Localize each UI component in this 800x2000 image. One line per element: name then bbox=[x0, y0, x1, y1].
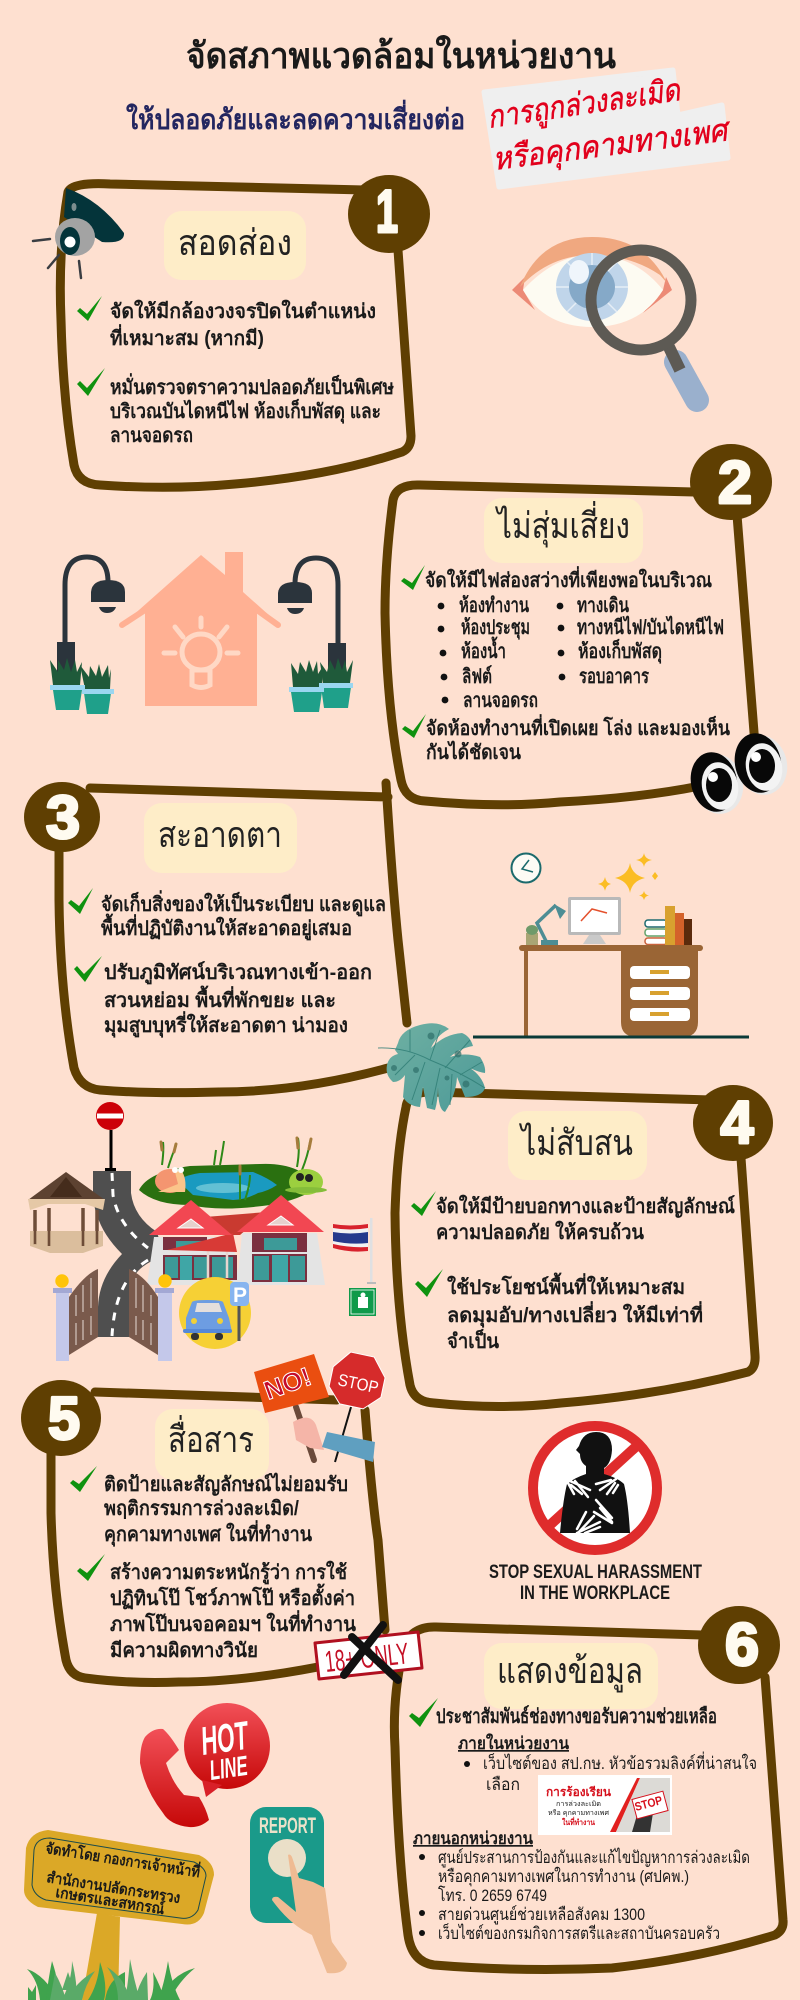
panel: card 1 bbox=[33, 175, 430, 487]
bullet list: lit areas: ห้องทำงาน bbox=[459, 594, 529, 617]
bullet list: lit areas bbox=[438, 594, 724, 712]
icon: eye and magnifying glass bbox=[512, 237, 697, 400]
text block: external channels bbox=[413, 1829, 750, 1943]
check mark bbox=[401, 565, 425, 590]
heading: card 3 bbox=[144, 803, 297, 873]
Thai flag bbox=[333, 1218, 376, 1284]
organiser text bbox=[44, 1837, 202, 1918]
icon: monstera leaf bbox=[378, 1023, 485, 1112]
grass bbox=[27, 1959, 195, 2000]
organiser text: เกษตรและสหกรณ์ bbox=[54, 1883, 166, 1918]
number badge 5: 5 bbox=[48, 1385, 80, 1452]
heading: card 3: สะอาดตา bbox=[158, 814, 282, 855]
frog bbox=[285, 1169, 327, 1195]
caption: stop sexual harassment bbox=[489, 1562, 702, 1604]
text block: internal channels: เลือก bbox=[486, 1775, 520, 1794]
NO and STOP signs held by hand: NO! bbox=[260, 1361, 315, 1406]
text block: cameras bbox=[110, 299, 376, 350]
clock bbox=[512, 854, 540, 882]
subtitle: ให้ปลอดภัยและลดความเสี่ยงต่อ bbox=[126, 99, 465, 135]
desk bbox=[519, 945, 703, 1037]
text block: landscape: สวนหย่อม พื้นที่พักขยะ และ bbox=[104, 985, 336, 1012]
check mark bbox=[77, 1554, 105, 1581]
number badge 4: 4 bbox=[720, 1089, 754, 1156]
check mark bbox=[415, 1269, 443, 1297]
illustration: workplace map bbox=[28, 1102, 376, 1361]
heading: card 6 bbox=[484, 1643, 658, 1709]
text block: awareness: มีความผิดทางวินัย bbox=[110, 1639, 258, 1662]
text block: awareness: ภาพโป๊บนจอคอมฯ ในที่ทำงาน bbox=[110, 1609, 356, 1636]
number badge 2 bbox=[690, 444, 772, 520]
pond bbox=[139, 1138, 318, 1208]
monitor bbox=[568, 897, 621, 944]
icon: stop sexual harassment bbox=[533, 1426, 657, 1550]
text block: landscape: ปรับภูมิทัศน์บริเวณทางเข้า-ออก bbox=[104, 961, 372, 986]
assembly point sign bbox=[349, 1288, 376, 1316]
text block: patrol: ลานจอดรถ bbox=[110, 425, 193, 447]
card 6 outline bbox=[394, 1627, 783, 1969]
text block: internal channels bbox=[458, 1733, 757, 1794]
text block: signage: จัดให้มีป้ายบอกทางและป้ายสัญลักษณ์ bbox=[436, 1194, 735, 1218]
panel: card 3 bbox=[24, 782, 407, 1093]
check mark bbox=[411, 1191, 436, 1216]
heading: card 1: สอดส่อง bbox=[178, 222, 292, 263]
icon: hotline: HOT bbox=[198, 1714, 253, 1764]
panel: card 5 bbox=[21, 1349, 389, 1682]
heading: card 2 bbox=[484, 498, 643, 563]
panel: card 2 bbox=[385, 444, 793, 819]
text block: awareness: สร้างความตระหนักรู้ว่า การใช้ bbox=[110, 1560, 347, 1586]
desk lamp and plant bbox=[526, 904, 566, 945]
bullet list: lit areas: ห้องเก็บพัสดุ bbox=[578, 638, 662, 664]
no-entry sign bbox=[96, 1102, 124, 1171]
bullet list: lit areas: ห้องประชุม bbox=[461, 616, 530, 640]
text block: space use: ใช้ประโยชน์พื้นที่ให้เหมาะสม bbox=[447, 1272, 685, 1299]
number badge 4 bbox=[693, 1085, 773, 1161]
thumbnail: complaint banner: หรือ คุกคามทางเพศ bbox=[548, 1809, 610, 1817]
sign board bbox=[24, 1830, 214, 1925]
text block: signage: ความปลอดภัย ให้ครบถ้วน bbox=[436, 1220, 644, 1244]
text block: signage against harassment bbox=[104, 1472, 348, 1547]
text block: external channels: เว็บไซต์ของกรมกิจการสตรีและสถาบันครอบครัว bbox=[438, 1922, 720, 1943]
highlighted subtitle: harassment bbox=[484, 70, 734, 187]
thumbnail: complaint banner: การร้องเรียน bbox=[546, 1785, 612, 1799]
check mark bbox=[70, 1466, 97, 1492]
bullet list: lit areas: ห้องน้ำ bbox=[461, 636, 506, 663]
snail bbox=[155, 1167, 186, 1193]
sticker: 18+ only crossed out bbox=[315, 1625, 422, 1680]
number badge 2: 2 bbox=[718, 449, 752, 516]
gazebo bbox=[28, 1172, 105, 1253]
house bbox=[122, 552, 280, 706]
text block: open rooms: กันได้ชัดเจน bbox=[426, 740, 521, 764]
text block: signage against harassment: ติดป้ายและสัญลักษณ์ไม่ยอมรับ bbox=[104, 1472, 348, 1496]
text block: tidy: พื้นที่ปฏิบัติงานให้สะอาดอยู่เสมอ bbox=[101, 913, 352, 942]
text block: awareness: ปฏิทินโป๊ โชว์ภาพโป๊ หรือตั้งค่า bbox=[110, 1583, 355, 1610]
text block: tidy bbox=[101, 889, 386, 942]
check mark bbox=[74, 956, 102, 982]
text block: tidy: จัดเก็บสิ่งของให้เป็นระเบียบ และดูแล bbox=[101, 889, 386, 918]
text block: awareness bbox=[110, 1560, 356, 1662]
heading: card 4: ไม่สับสน bbox=[518, 1122, 633, 1163]
text block: lighting: จัดให้มีไฟส่องสว่างที่เพียงพอในบริเวณ bbox=[425, 565, 712, 592]
number badge 1 bbox=[348, 175, 430, 253]
illustration: tidy desk bbox=[473, 853, 749, 1038]
card 2 outline bbox=[385, 485, 700, 805]
title: จัดสภาพแวดล้อมในหน่วยงาน bbox=[186, 34, 616, 76]
text block: signage against harassment: พฤติกรรมการล่วงละเมิด/ bbox=[104, 1498, 299, 1520]
sign: organiser credit bbox=[24, 1830, 214, 2000]
text block: open rooms bbox=[426, 713, 730, 764]
text block: patrol bbox=[110, 372, 394, 447]
number badge 6: 6 bbox=[725, 1611, 759, 1678]
text block: internal channels: ภายในหน่วยงาน bbox=[458, 1733, 569, 1753]
number badge 1: 1 bbox=[376, 178, 398, 245]
heading: card 4 bbox=[508, 1111, 647, 1180]
icon: security camera bbox=[33, 188, 124, 278]
check mark bbox=[409, 1698, 438, 1727]
icon: hotline bbox=[140, 1703, 270, 1827]
building bbox=[147, 1195, 325, 1285]
text block: landscape: มุมสูบบุหรี่ให้สะอาดตา น่ามอง bbox=[104, 1010, 348, 1039]
card 3 outline bbox=[59, 783, 407, 1093]
card 1 outline bbox=[60, 184, 411, 487]
text block: open rooms: จัดห้องทำงานที่เปิดเผย โล่ง และมองเห็น bbox=[426, 713, 730, 740]
text block: space use: ลดมุมอับ/ทางเปลี่ยว ให้มีเท่าที่ bbox=[447, 1300, 703, 1328]
organiser text: สำนักงานปลัดกระทรวง bbox=[45, 1869, 181, 1907]
thumbnail: complaint banner: การล่วงละเมิด bbox=[556, 1800, 601, 1808]
text block: internal channels: เว็บไซต์ของ สป.กษ. หัวข้อรวมลิงค์ที่น่าสนใจ bbox=[483, 1751, 757, 1773]
road bbox=[93, 1171, 165, 1337]
text block: cameras: ที่เหมาะสม (หากมี) bbox=[110, 323, 264, 350]
text block: cameras: จัดให้มีกล้องวงจรปิดในตำแหน่ง bbox=[110, 299, 376, 323]
text block: signage bbox=[436, 1194, 735, 1244]
bullet list: lit areas: ทางหนีไฟ/บันไดหนีไฟ bbox=[577, 615, 724, 639]
heading: card 5: สื่อสาร bbox=[168, 1415, 254, 1460]
text block: external channels: ภายนอกหน่วยงาน bbox=[413, 1829, 533, 1848]
NO and STOP signs held by hand bbox=[254, 1349, 389, 1462]
bullet list: lit areas: ลานจอดรถ bbox=[463, 690, 538, 712]
icon: cartoon eyes bbox=[685, 729, 793, 819]
lamp left bbox=[57, 557, 125, 672]
highlighted subtitle: harassment: การถูกล่วงละเมิด bbox=[485, 72, 684, 137]
number badge 5 bbox=[21, 1380, 101, 1456]
icon: report button: REPORT bbox=[259, 1813, 316, 1838]
heading: card 6: แสดงข้อมูล bbox=[497, 1650, 643, 1693]
card 5 outline bbox=[51, 1392, 385, 1682]
heading: card 1 bbox=[164, 211, 306, 280]
sticker: 18+ only crossed out: 18+ ONLY bbox=[323, 1637, 410, 1679]
check mark bbox=[402, 714, 426, 738]
text block: external channels: หรือคุกคามทางเพศในการทำงาน (ศปคพ.) bbox=[438, 1866, 689, 1887]
lamp right bbox=[278, 558, 346, 673]
thumbnail: complaint banner: ในที่ทำงาน bbox=[562, 1816, 595, 1827]
text block: patrol: หมั่นตรวจตราความปลอดภัยเป็นพิเศษ bbox=[110, 372, 394, 399]
check mark bbox=[68, 888, 93, 914]
hand pressing button bbox=[272, 1855, 347, 1973]
heading: card 2: ไม่สุ่มเสี่ยง bbox=[495, 501, 630, 548]
text block: external channels: โทร. 0 2659 6749 bbox=[438, 1885, 547, 1905]
floor line bbox=[473, 1036, 749, 1038]
number badge 3: 3 bbox=[46, 784, 80, 851]
number badge 3 bbox=[24, 782, 100, 852]
caption: stop sexual harassment: IN THE WORKPLACE bbox=[520, 1583, 670, 1604]
thumbnail: complaint banner bbox=[538, 1775, 672, 1835]
organiser text: จัดทำโดย กองการเจ้าหน้าที่ bbox=[44, 1837, 202, 1881]
caption: stop sexual harassment: STOP SEXUAL HARASSMENT bbox=[489, 1562, 702, 1583]
bullet list: lit areas: รอบอาคาร bbox=[579, 666, 649, 688]
gate bbox=[53, 1269, 174, 1361]
panel: card 6 bbox=[394, 1606, 783, 1969]
bullet list: lit areas: ทางเดิน bbox=[577, 595, 629, 617]
text block: space use bbox=[447, 1272, 703, 1353]
check mark bbox=[77, 368, 105, 396]
text block: landscape bbox=[104, 961, 372, 1039]
highlighted subtitle: harassment: หรือคุกคามทางเพศ bbox=[490, 112, 734, 179]
text block: patrol: บริเวณบันไดหนีไฟ ห้องเก็บพัสดุ และ bbox=[110, 398, 381, 424]
heading: card 5 bbox=[155, 1409, 269, 1480]
sparkles bbox=[598, 853, 658, 900]
text block: space use: จำเป็น bbox=[447, 1328, 499, 1353]
books bbox=[645, 906, 692, 945]
sign post bbox=[82, 1913, 120, 2000]
card 4 outline bbox=[395, 1092, 755, 1406]
bullet list: lit areas: ลิฟต์ bbox=[462, 665, 492, 688]
parking badge and car: P bbox=[233, 1284, 247, 1307]
text block: help channels: ประชาสัมพันธ์ช่องทางขอรับความช่วยเหลือ bbox=[436, 1705, 717, 1728]
potted plants bbox=[50, 658, 353, 714]
icon: report button bbox=[250, 1807, 347, 1973]
panel: card 4 bbox=[395, 1085, 773, 1406]
icon: hotline: LINE bbox=[208, 1750, 250, 1786]
thumbnail: complaint banner: STOP bbox=[633, 1793, 664, 1814]
NO and STOP signs held by hand: STOP bbox=[336, 1370, 380, 1397]
number badge 6 bbox=[698, 1606, 780, 1684]
illustration: house with lamps and plants bbox=[50, 552, 353, 714]
text block: external channels: สายด่วนศูนย์ช่วยเหลือสังคม 1300 bbox=[438, 1905, 645, 1925]
parking badge and car bbox=[179, 1277, 251, 1349]
check mark bbox=[77, 296, 102, 321]
text block: signage against harassment: คุกคามทางเพศ ในที่ทำงาน bbox=[104, 1519, 312, 1547]
